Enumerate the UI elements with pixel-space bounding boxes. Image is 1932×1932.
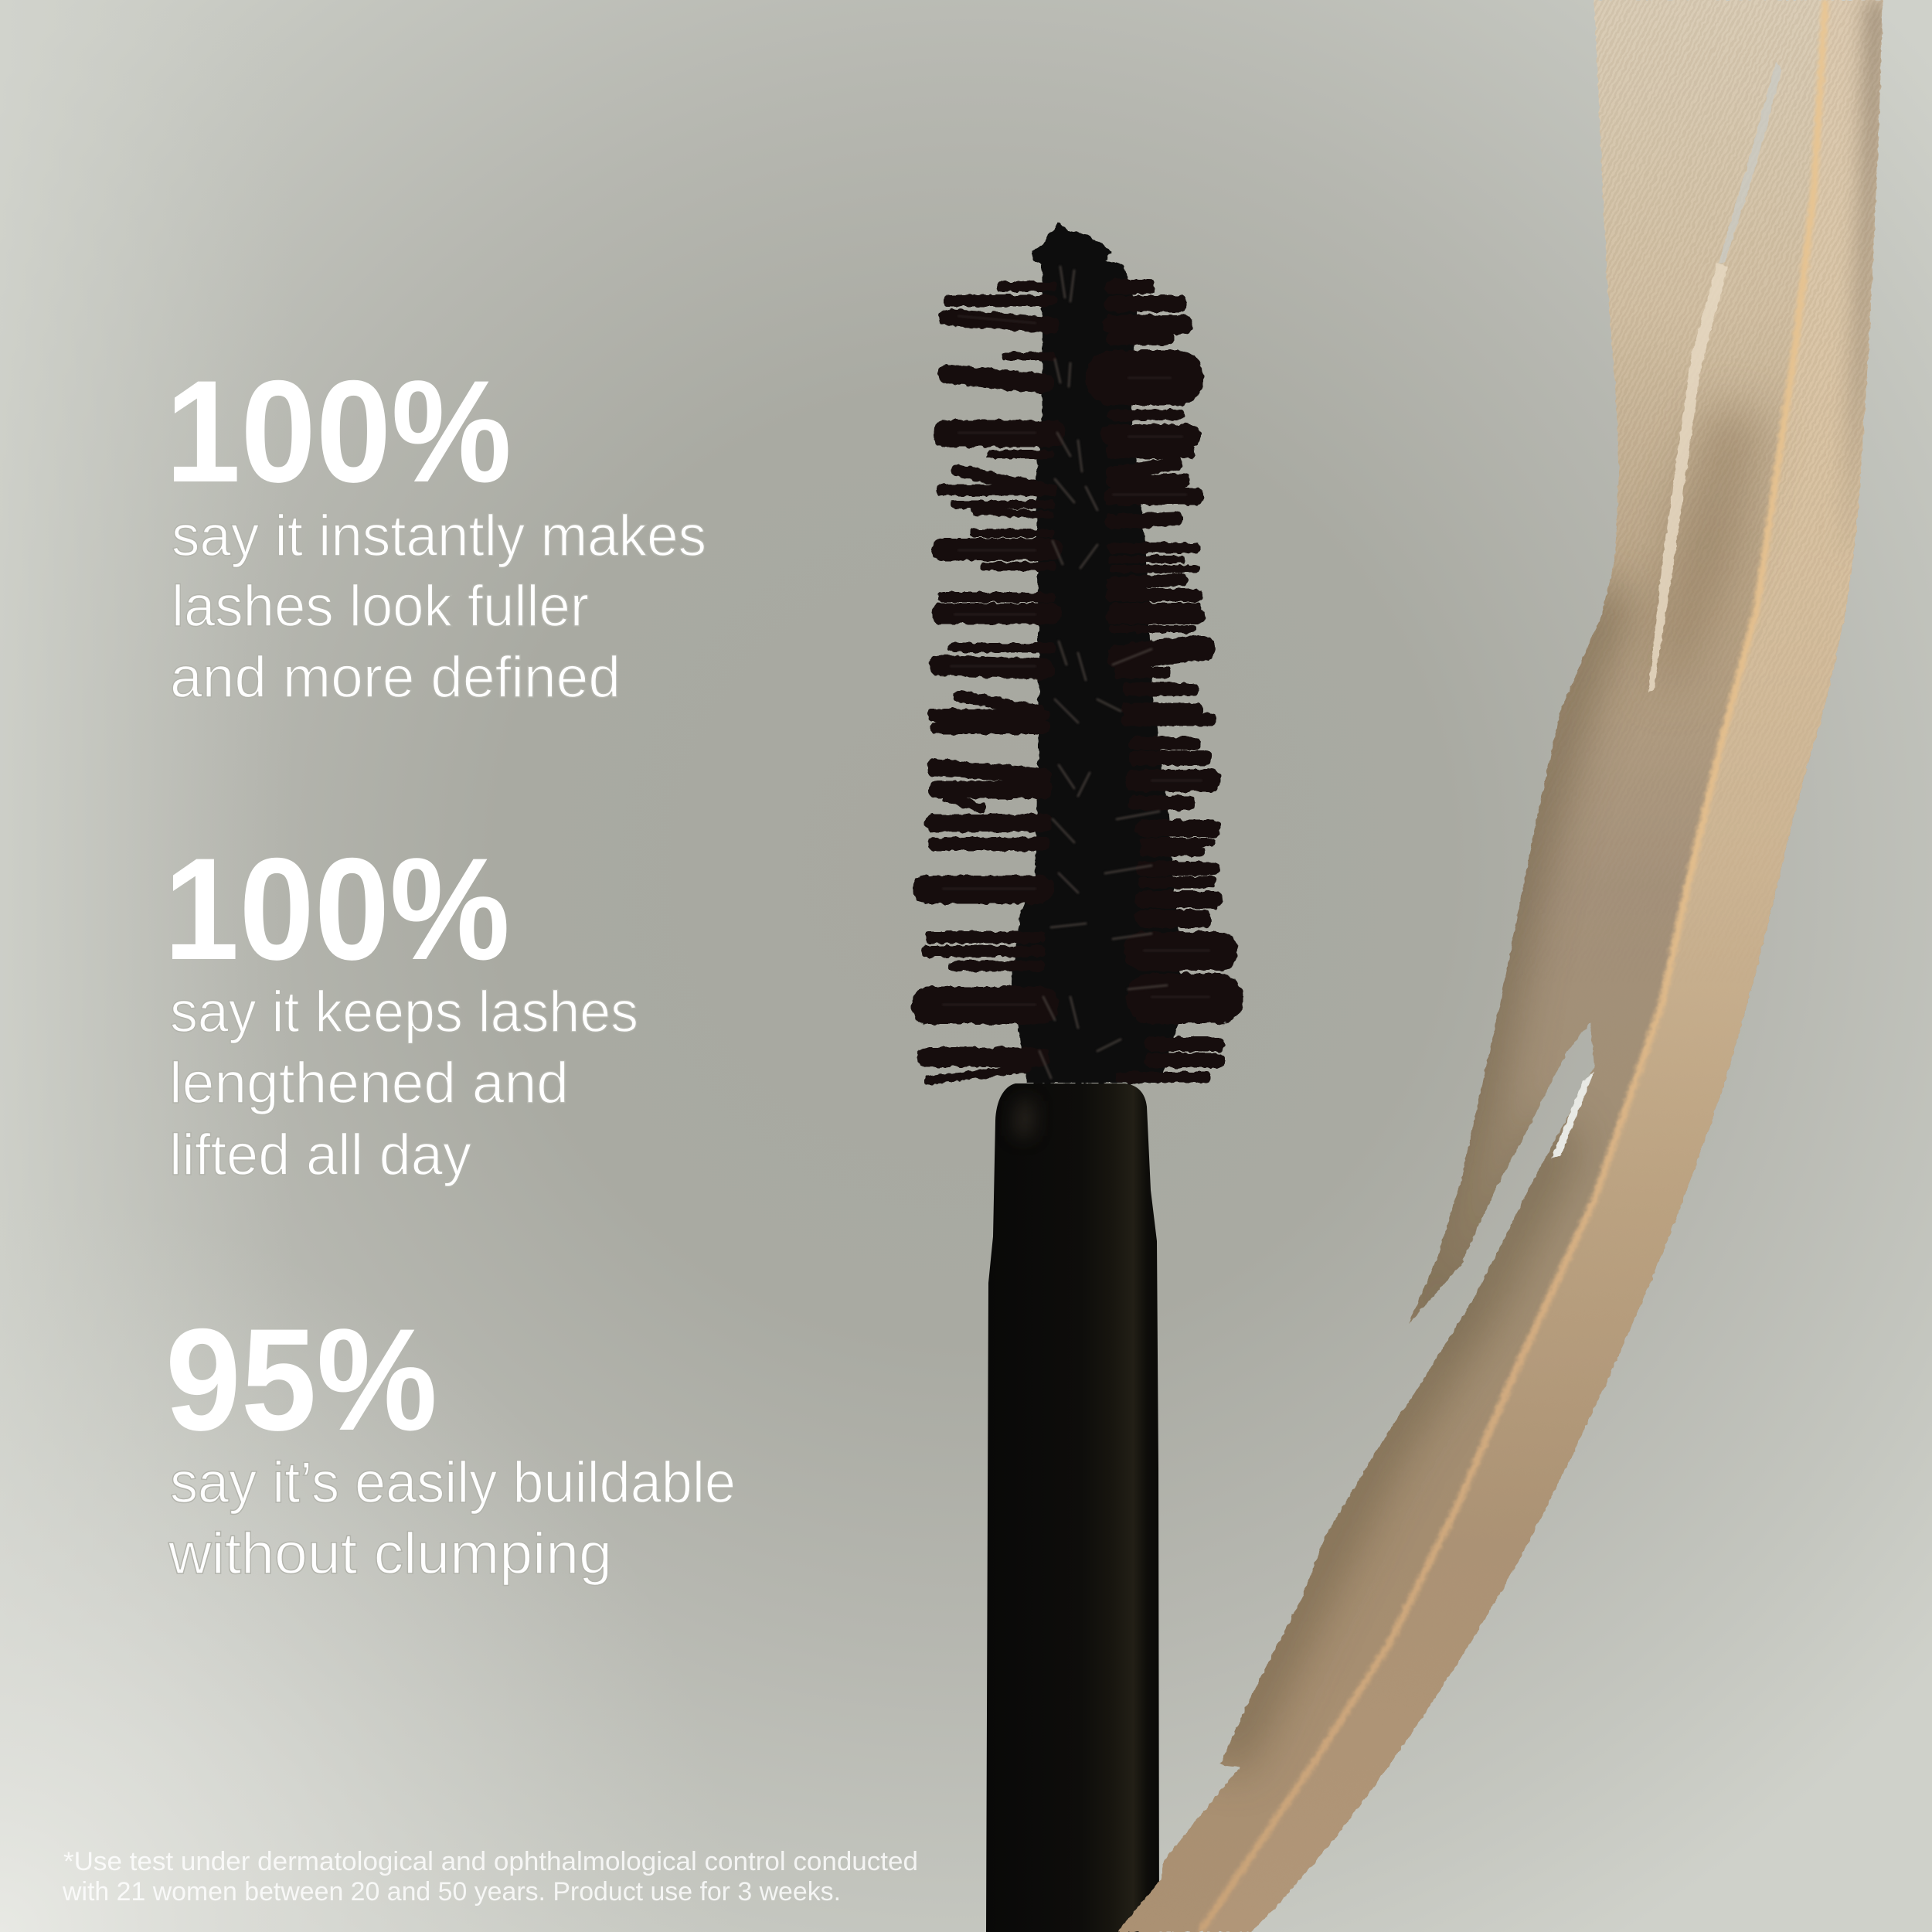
mascara brush [927,223,1218,1082]
stat description: lashes look fuller [172,573,589,638]
brush silhouette [927,223,1218,1082]
stat description: without clumping [168,1521,612,1586]
core highlights [1039,267,1167,1078]
feather base [1118,0,1864,1932]
wand tube [986,1083,1159,1932]
wand highlight [1014,1101,1034,1136]
light quill strip [1648,263,1728,692]
footnote: with 21 women between 20 and 50 years. Product use for 3 weeks. [62,1877,841,1906]
slit [1719,62,1782,263]
stat 1 [165,350,706,709]
stat description [170,503,706,709]
stat description: say it keeps lashes [170,979,638,1044]
stat 2 [164,828,638,1187]
stat description: lifted all day [169,1122,471,1187]
bristles [927,287,1218,1080]
footnote: *Use test under dermatological and ophthalmological control conducted [63,1847,918,1876]
stat description: lengthened and [169,1050,569,1115]
stat number: 100% [165,350,512,512]
right vane [1251,306,1867,1932]
stat description: and more defined [170,645,621,709]
stat 3 [165,1298,736,1586]
stat description [169,979,638,1187]
edge band [1849,0,1876,556]
footnote [62,1847,918,1906]
stat number: 95% [165,1298,437,1461]
inner vane shading [1654,402,1762,696]
stat description: say it instantly makes [172,503,706,568]
feather edge shadow [1221,587,1611,1764]
feather gap [1551,1071,1594,1158]
stat description: say it’s easily buildable [170,1450,736,1515]
stat number: 100% [164,828,510,990]
stat description [168,1450,736,1586]
mascara wand [986,1083,1159,1932]
feather barbs [1594,0,1883,545]
bristle sheen [943,316,1209,1005]
brush core [1012,223,1182,1082]
feather [1082,0,1932,1932]
feather shaft [1200,0,1825,1932]
